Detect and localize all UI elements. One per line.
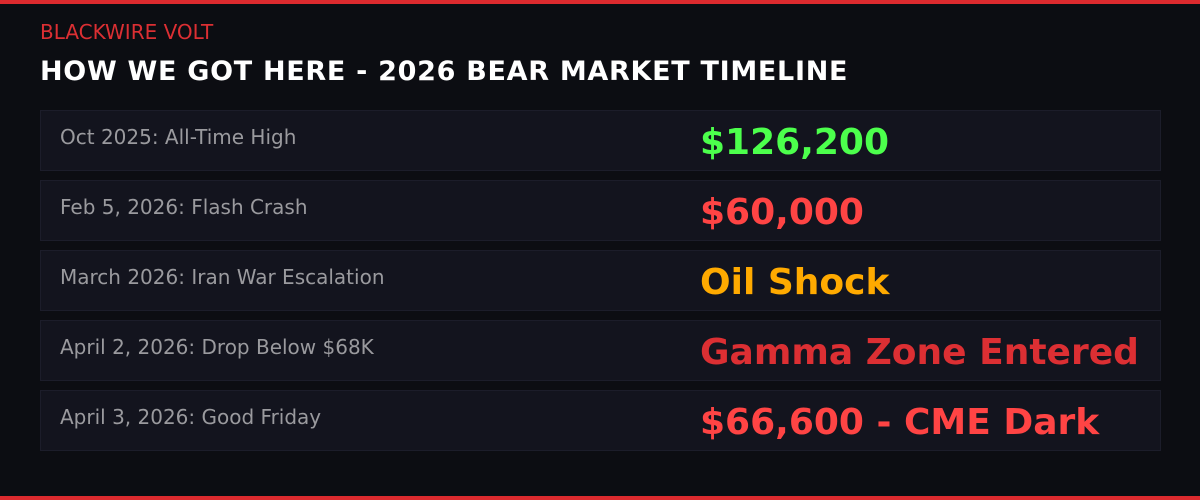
row: all-time high: $126,200 bbox=[700, 122, 889, 163]
title: HOW WE GOT HERE - 2026 BEAR MARKET TIMELINE bbox=[40, 56, 848, 87]
row: drop below 68k bbox=[40, 320, 1161, 381]
row: good friday: April 3, 2026: Good Friday bbox=[60, 405, 321, 429]
row: drop below 68k: April 2, 2026: Drop Below $68K bbox=[60, 335, 374, 359]
row: flash crash: Feb 5, 2026: Flash Crash bbox=[60, 195, 308, 219]
row: flash crash: $60,000 bbox=[700, 192, 864, 233]
row: iran war bbox=[40, 250, 1161, 311]
row: iran war: March 2026: Iran War Escalation bbox=[60, 265, 384, 289]
row: all-time high bbox=[40, 110, 1161, 171]
row: good friday: $66,600 - CME Dark bbox=[700, 402, 1099, 443]
row: good friday bbox=[40, 390, 1161, 451]
row: drop below 68k: Gamma Zone Entered bbox=[700, 332, 1139, 373]
row: flash crash bbox=[40, 180, 1161, 241]
row: iran war: Oil Shock bbox=[700, 262, 889, 303]
brand: BLACKWIRE VOLT bbox=[40, 20, 213, 44]
row: all-time high: Oct 2025: All-Time High bbox=[60, 125, 296, 149]
